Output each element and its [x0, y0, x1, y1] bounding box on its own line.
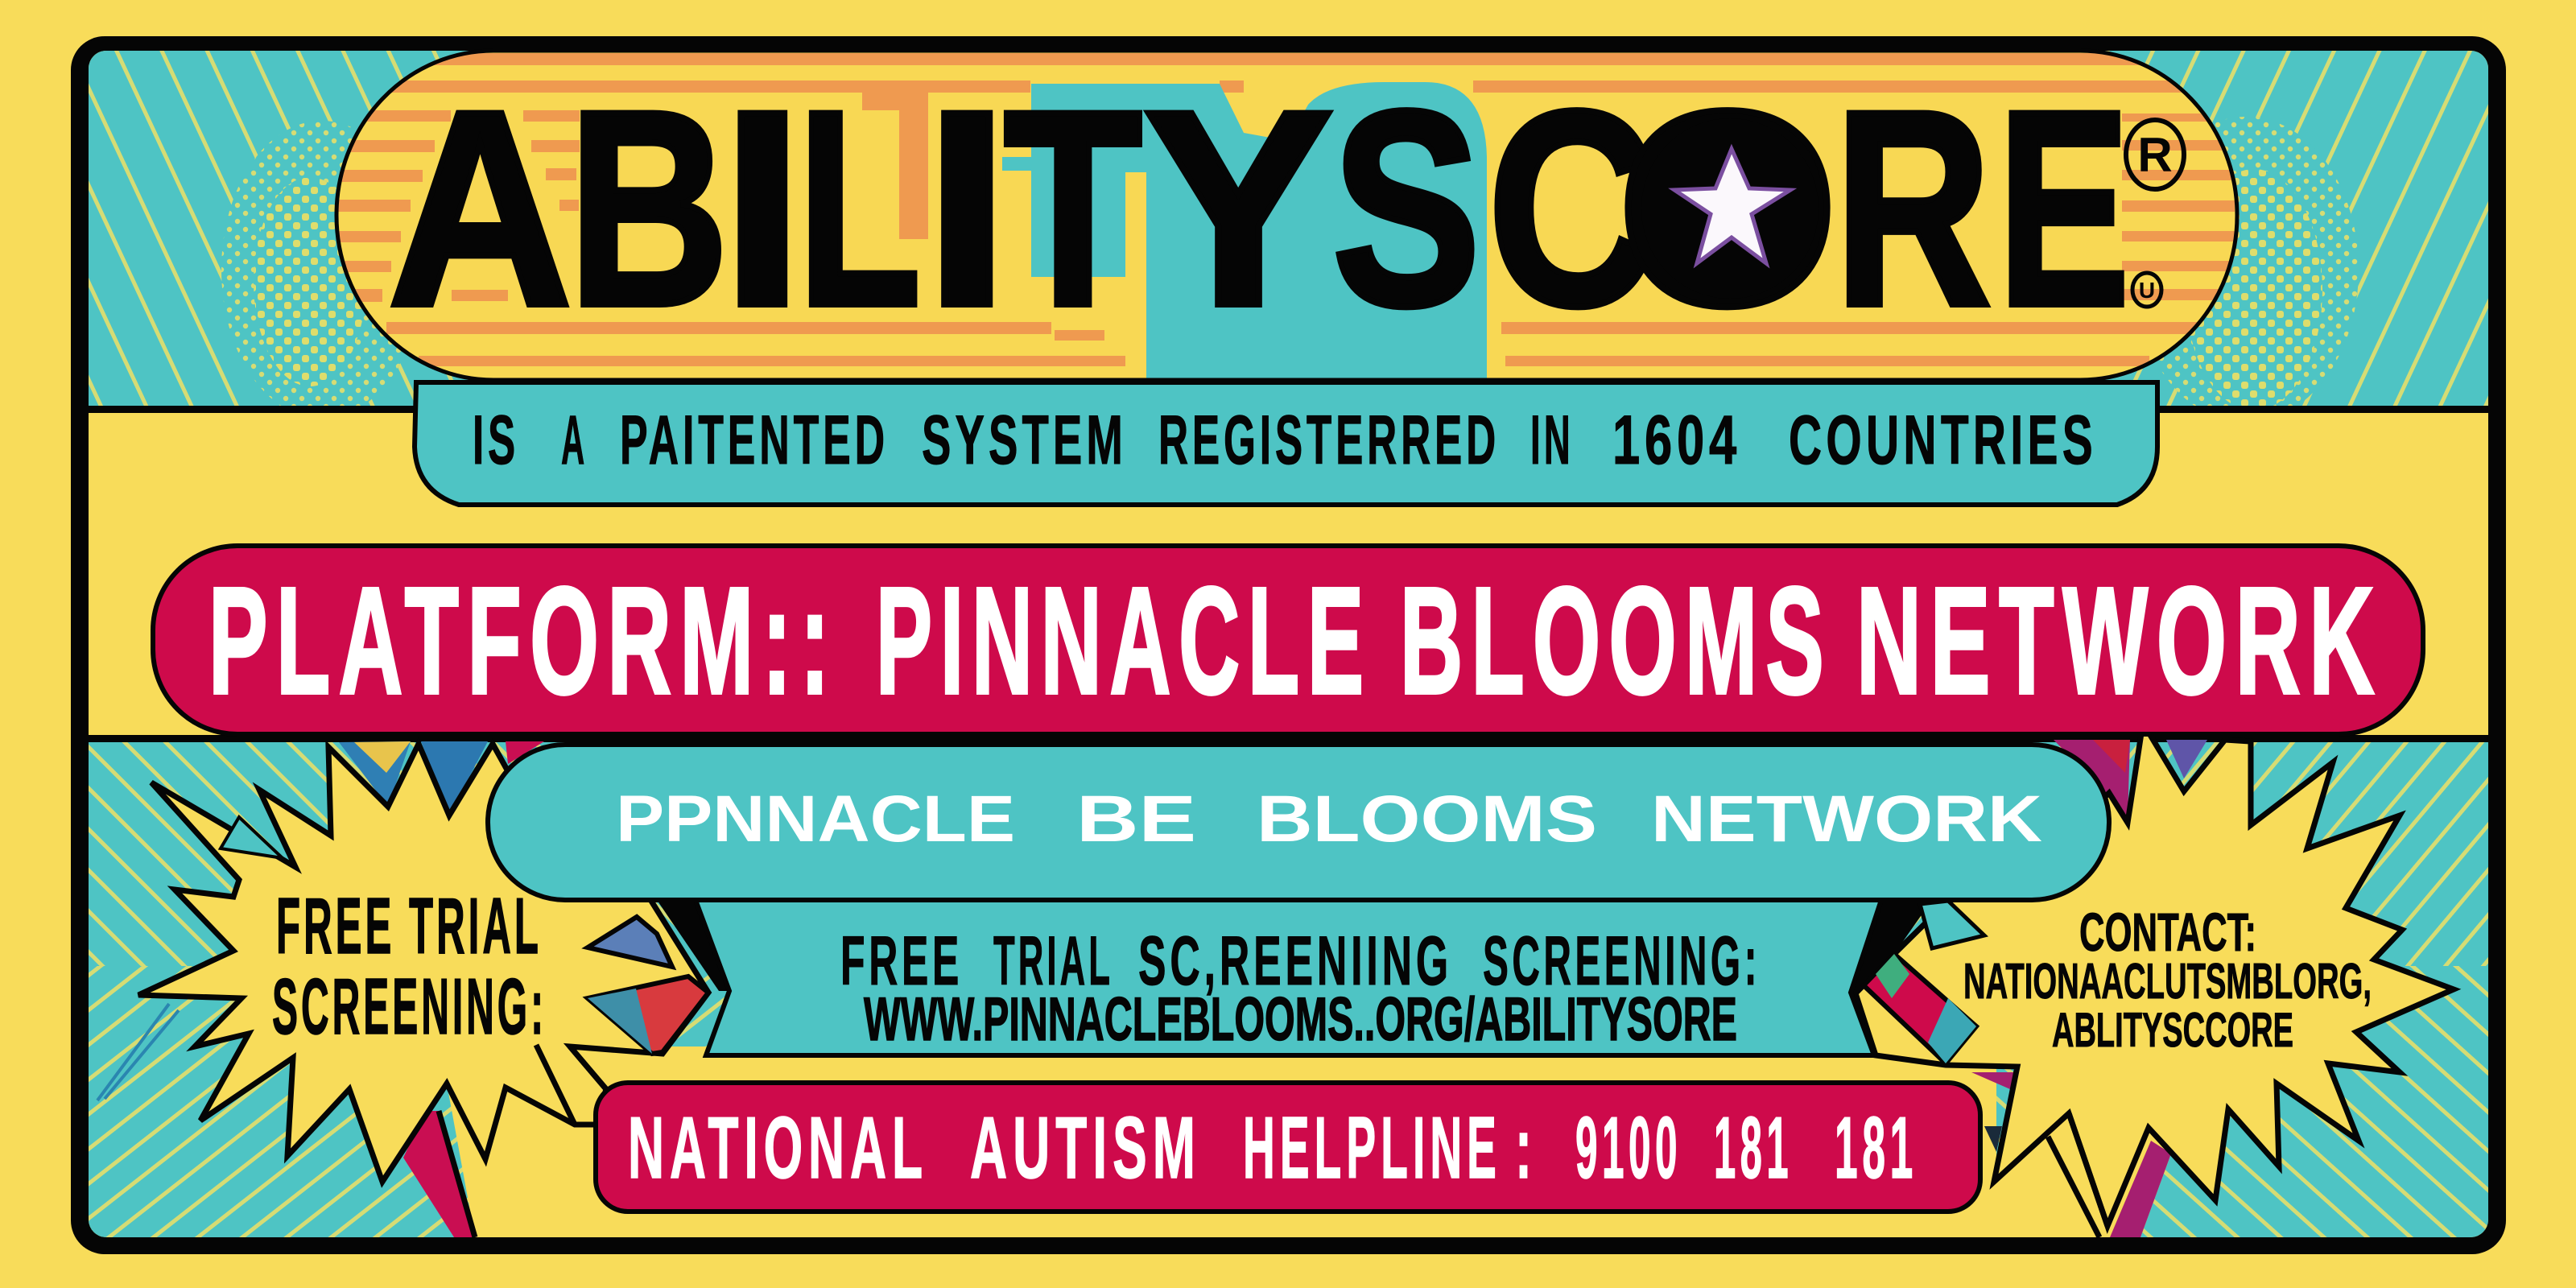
- platform text: BLOOMS: [1400, 556, 1832, 726]
- title wordmark: A: [388, 54, 572, 364]
- title wordmark: T: [1004, 53, 1142, 363]
- subtitle text: A: [561, 402, 588, 479]
- registered marks: R: [2137, 128, 2173, 182]
- helpline text: HELPLINE: [1243, 1099, 1501, 1197]
- platform text: PINNACLE: [876, 556, 1372, 726]
- subtitle text: IS: [473, 402, 519, 479]
- free trial burst text: FREE TRIAL: [276, 881, 542, 970]
- title wordmark: R: [1835, 53, 1991, 364]
- free trial line: [840, 923, 1761, 1000]
- star in the O: [1641, 118, 1818, 299]
- starburst: contact: [1856, 723, 2454, 1226]
- free trial line: TRIAL: [993, 923, 1113, 1000]
- platform text: PLATFORM::: [208, 556, 838, 726]
- helpline text: 9100: [1575, 1099, 1682, 1197]
- platform text: [208, 556, 2383, 726]
- title pill: [322, 51, 2254, 380]
- title wordmark: C: [1488, 53, 1656, 364]
- network teal pill: [488, 745, 2109, 900]
- pill base: [336, 51, 2237, 380]
- network text: [616, 782, 2042, 856]
- colour fragments behind bursts: [339, 740, 2207, 1152]
- helpline text: :: [1515, 1099, 1538, 1197]
- network text: BE: [1076, 782, 1196, 856]
- title wordmark: Y: [1144, 53, 1333, 363]
- contact burst text: ABLITYSCCORE: [2052, 1003, 2293, 1057]
- subtitle text: COUNTRIES: [1789, 402, 2097, 479]
- free trial line: SCREENING:: [1483, 923, 1761, 1000]
- helpline text: 181: [1714, 1099, 1793, 1197]
- title wordmark: I: [924, 54, 1009, 364]
- url line: WWW.PINNACLEBLOOMS..ORG/ABILITYSORE: [864, 985, 1737, 1054]
- subtitle banner: [415, 382, 2157, 505]
- pill stripes and teal block: [322, 53, 2254, 380]
- helpline box: 181: [1835, 1099, 1918, 1197]
- title wordmark: O: [1616, 54, 1839, 364]
- title wordmark: L: [798, 53, 921, 363]
- contact burst text: CONTACT:: [2079, 902, 2256, 963]
- title wordmark: I: [721, 53, 804, 363]
- subtitle text: SYSTEM: [922, 402, 1127, 479]
- subtitle text: REGISTERRED: [1158, 402, 1500, 479]
- platform banner: [153, 546, 2423, 734]
- helpline text: NATIONAL: [628, 1099, 928, 1197]
- helpline text: AUTISM: [970, 1099, 1201, 1197]
- centre teal panel: [696, 900, 1881, 1055]
- contact burst text: [1963, 902, 2372, 1057]
- yellow lower centre band: [447, 1046, 2171, 1237]
- free trial burst text: [272, 881, 547, 1051]
- purple wedge: right burst: [2110, 1141, 2171, 1237]
- burst details and fragments: [221, 817, 2107, 1237]
- pill outline: [336, 51, 2237, 380]
- text: SCREENING:: [272, 962, 547, 1051]
- network text: PPNNACLE: [616, 782, 1015, 856]
- subtitle text: 1604: [1612, 402, 1741, 479]
- title wordmark: E: [1998, 54, 2129, 364]
- title wordmark: [388, 53, 2129, 364]
- registered marks: [2126, 120, 2184, 307]
- network text: BLOOMS: [1257, 782, 1597, 856]
- subtitle text: PAITENTED: [620, 402, 889, 479]
- helpline box: [596, 1083, 1980, 1212]
- title wordmark: S: [1332, 54, 1480, 364]
- crimson wedge: left burst: [403, 1111, 475, 1237]
- free trial line: SC,REENIING: [1138, 923, 1452, 1000]
- network text: NETWORK: [1651, 782, 2042, 856]
- helpline text: [628, 1099, 1918, 1197]
- subtitle text: [473, 402, 2097, 479]
- starburst: free trial: [138, 744, 708, 1182]
- subtitle text: IN: [1530, 402, 1574, 479]
- free trial line: FREE: [840, 923, 963, 1000]
- registered marks: U: [2139, 278, 2155, 303]
- title wordmark: B: [568, 54, 729, 364]
